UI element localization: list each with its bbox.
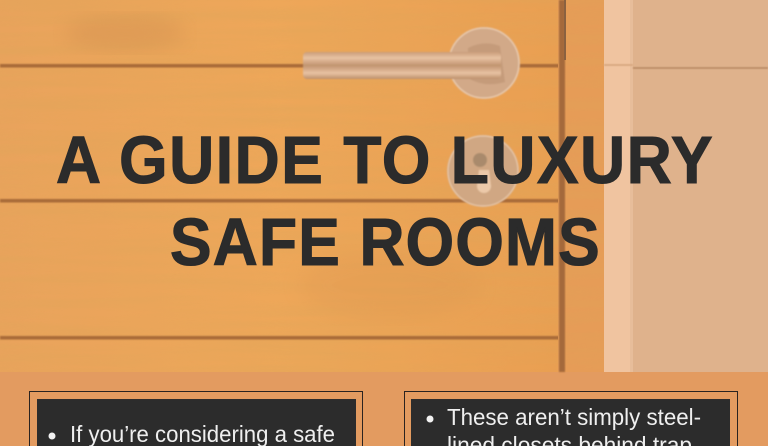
wall trim (604, 0, 630, 372)
text: right card line one: These aren’t simply steel- (447, 404, 701, 430)
title: A GUIDE TO LUXURY (56, 122, 713, 197)
wall tiles (604, 0, 768, 372)
bullet: left card (48, 432, 56, 440)
bullet: right card (426, 416, 434, 422)
panel: right text card (404, 392, 738, 446)
door handle (303, 27, 520, 99)
title: SAFE ROOMS (170, 204, 600, 279)
title (56, 122, 713, 279)
panel: left text card (30, 392, 362, 446)
door planks (0, 0, 560, 372)
lock plate (447, 135, 519, 207)
door frame (558, 0, 604, 372)
